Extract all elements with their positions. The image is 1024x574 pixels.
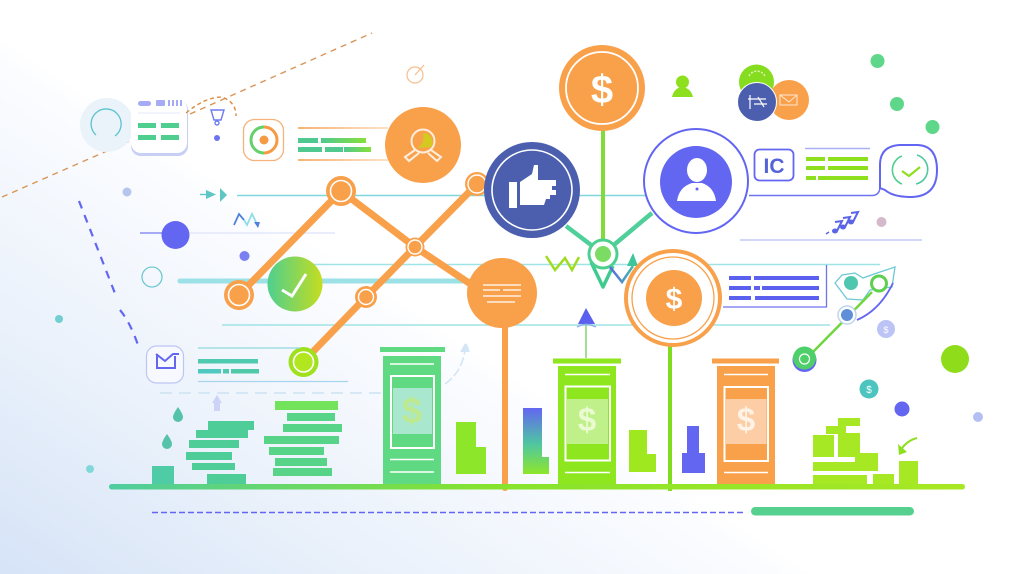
green stem top xyxy=(601,130,605,255)
gradient step block xyxy=(523,408,549,474)
blue-teal zigzag arrow xyxy=(610,253,638,282)
up arrow above green tower xyxy=(577,308,596,358)
icon: rounded target xyxy=(244,120,284,160)
pale circle with teal arc xyxy=(80,98,134,152)
pale up arrow xyxy=(212,395,222,411)
lower dollar badge: $ xyxy=(666,283,683,316)
person badge xyxy=(644,129,748,233)
pale blue dot xyxy=(973,412,983,422)
IC box: IC xyxy=(764,155,784,178)
lime step block two xyxy=(629,430,656,472)
stair stack two xyxy=(264,401,342,476)
dashed orange arc around funnel xyxy=(186,97,236,116)
orange document tower xyxy=(712,358,779,486)
orange document tower: $ xyxy=(737,401,755,438)
blue dot xyxy=(894,402,910,416)
green zigzag xyxy=(546,256,579,270)
dashed blue curve left xyxy=(79,201,138,345)
lime document tower: $ xyxy=(578,401,596,438)
dashed orange diagonal xyxy=(2,33,372,197)
dot xyxy=(122,188,132,196)
curved pale arrow xyxy=(445,343,469,384)
top dollar badge: $ xyxy=(591,68,613,112)
baseline xyxy=(109,484,965,490)
pale coin xyxy=(877,320,895,338)
icon: funnel xyxy=(211,110,224,141)
text block lines orange xyxy=(298,128,388,160)
lime step block xyxy=(456,422,486,474)
lower dollar badge xyxy=(626,251,720,345)
card with green bars xyxy=(131,99,188,156)
icon cluster xyxy=(738,64,809,122)
teal coin xyxy=(860,380,878,398)
orange text circle xyxy=(467,258,537,328)
green document tower: $ xyxy=(402,390,422,431)
check bubble xyxy=(880,145,937,197)
small dot xyxy=(240,251,250,261)
green growth arrow xyxy=(811,292,872,354)
orange line chart xyxy=(239,184,502,362)
lime bricks xyxy=(813,418,918,485)
blue step block xyxy=(682,426,705,473)
small node on arrow xyxy=(838,306,856,324)
stair stack one xyxy=(186,421,254,485)
top dollar badge xyxy=(559,45,645,131)
teal block xyxy=(152,466,174,485)
blue text block xyxy=(723,265,826,307)
icon: green person xyxy=(672,76,693,97)
teal coin: $ xyxy=(866,385,872,396)
teal text lines xyxy=(198,348,348,382)
blue node on line xyxy=(162,221,190,249)
teal ring xyxy=(142,267,162,287)
IC box xyxy=(754,150,794,180)
pin shape below hub xyxy=(591,262,613,287)
connector lines to hub xyxy=(566,213,652,254)
green pill xyxy=(751,507,914,516)
green document tower xyxy=(380,347,445,486)
water drops xyxy=(162,407,183,449)
music-like marks xyxy=(826,212,858,234)
check basket icon xyxy=(146,346,184,383)
text lines green xyxy=(805,148,870,180)
lime dot xyxy=(941,345,969,373)
squiggle icon xyxy=(234,214,260,228)
dashed blue footer line xyxy=(152,512,746,514)
orange stem xyxy=(502,320,508,491)
network icon top right xyxy=(835,267,895,320)
orange circle with magnifier xyxy=(385,107,461,183)
arrow icon xyxy=(200,188,227,202)
dot teal lower xyxy=(86,465,94,473)
green check circle xyxy=(268,256,322,312)
green dots xyxy=(870,54,940,134)
lower dollar badge stem xyxy=(668,345,672,491)
blue connector line xyxy=(749,188,880,196)
thumbs up badge xyxy=(484,142,580,238)
green target node xyxy=(792,346,816,372)
dot teal xyxy=(55,315,63,323)
hub node xyxy=(589,240,617,268)
green start node xyxy=(288,347,318,377)
chart nodes xyxy=(224,172,489,310)
pale dot xyxy=(876,217,886,227)
small clock icon xyxy=(407,65,424,83)
lime document tower xyxy=(553,358,621,486)
pale coin: $ xyxy=(883,325,889,335)
guide lines xyxy=(140,196,922,393)
